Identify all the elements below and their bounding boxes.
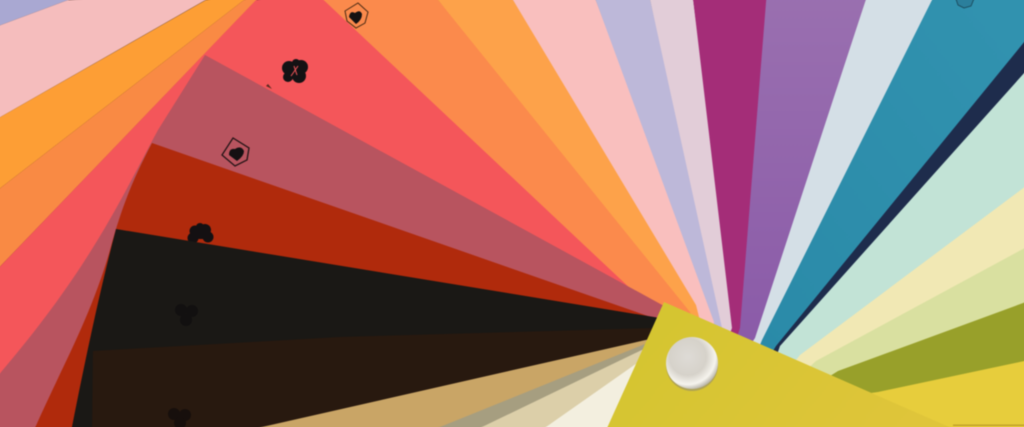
swatch: light orange — [0, 0, 257, 196]
right fan of swatches — [313, 0, 1024, 427]
icon: heart pentagon on orange — [345, 3, 368, 28]
swatch: right orange — [313, 0, 710, 360]
swatch: dark red — [31, 143, 665, 427]
icon: recycling flower on dark red — [188, 223, 214, 244]
swatch: coral — [0, 0, 700, 415]
left fan of warm swatches — [0, 0, 700, 415]
swatch: purple — [730, 0, 869, 360]
swatch: pale pink — [0, 0, 223, 123]
swatch: lavender corner — [0, 0, 80, 29]
swatch: sage grey — [415, 342, 650, 427]
swatch: teal — [750, 0, 1024, 370]
rivet — [666, 337, 718, 391]
swatch: pale green — [790, 243, 1024, 385]
swatch: rose — [0, 55, 675, 427]
icon: mark on teal — [955, 0, 975, 8]
icon: faint mark on black — [175, 304, 198, 326]
swatch: cream — [462, 346, 650, 427]
swatch: mint — [770, 62, 1024, 375]
swatch: bottom right yellow — [820, 359, 1024, 427]
swatch: pale blue — [740, 0, 938, 360]
swatch: pale yellow — [780, 180, 1024, 380]
edge line bottom right — [953, 424, 1024, 426]
swatch: off white — [532, 354, 650, 427]
icon: faint mark on brown — [168, 408, 191, 427]
swatch: dark brown — [92, 328, 655, 427]
swatch: blush — [648, 0, 736, 360]
swatch: deep orange — [0, 0, 266, 277]
swatch: magenta — [692, 0, 768, 360]
swatch: olive — [800, 299, 1024, 397]
swatch: lavender — [592, 0, 727, 360]
top yellow card — [603, 302, 972, 427]
icon: heart pentagon on rose — [222, 138, 249, 166]
swatch: right pale pink — [507, 0, 720, 360]
icon: small tick on coral — [266, 84, 272, 89]
swatch: right light orange — [430, 0, 712, 360]
icon: recycling flower on coral — [282, 59, 308, 83]
swatch: tan — [220, 339, 650, 427]
swatch: black — [70, 229, 660, 427]
swatch: navy — [760, 30, 1024, 372]
